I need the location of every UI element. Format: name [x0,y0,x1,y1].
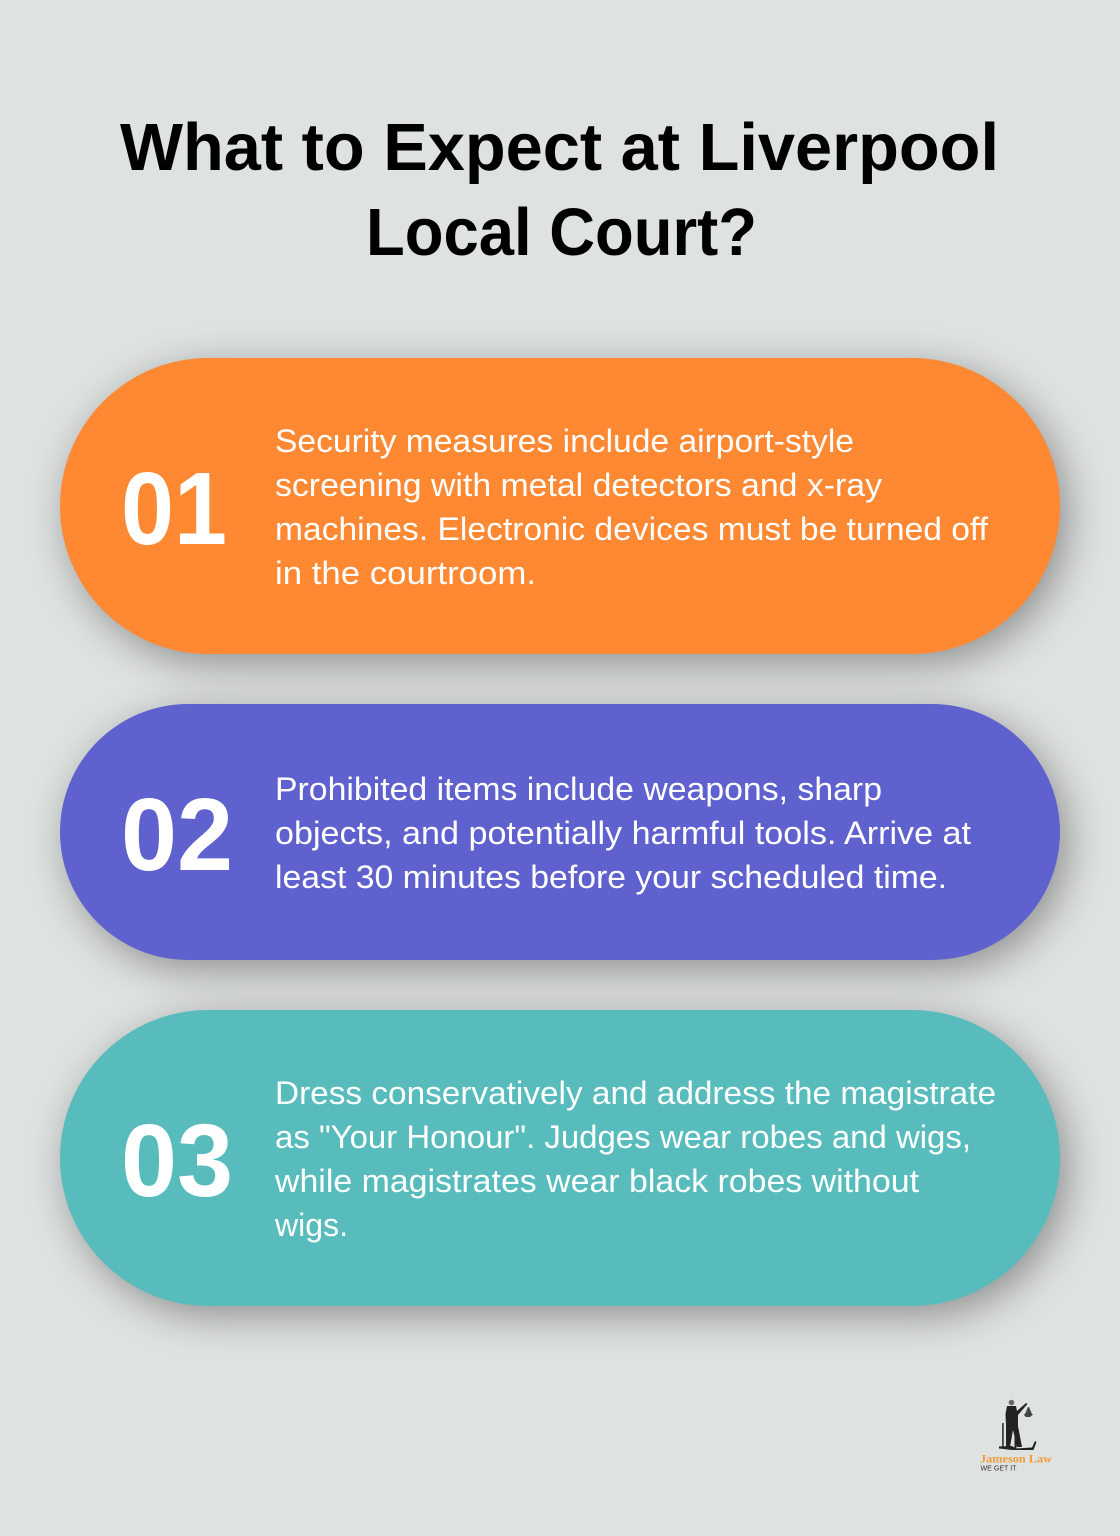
logo tagline: WE GET IT [980,1466,1017,1472]
orange pill background [60,358,1060,654]
text: dress conservatively: as "Your Honour". Judges wear robes and wigs, [275,1119,971,1155]
text: prohibited items: Prohibited items include weapons, sharp [275,771,882,807]
text: security measures: screening with metal detectors and x-ray [275,467,883,503]
text: security measures [275,423,989,591]
text: prohibited items: least 30 minutes before your scheduled time. [275,859,947,895]
logo wordmark: Jameson Law [980,1454,1053,1466]
text: dress conservatively [274,1075,996,1243]
text: prohibited items: objects, and potentially harmful tools. Arrive at [275,815,971,851]
title: Local Court? [366,195,757,270]
logo: Jameson Law [980,1400,1053,1472]
purple pill background [60,704,1060,960]
number 02: 02 [121,777,233,892]
title [120,110,999,270]
text: prohibited items [275,771,971,895]
panel: step 02 prohibited items [60,704,1060,960]
icon: lady justice [999,1400,1036,1450]
panel: step 03 dress and address [60,1010,1060,1306]
teal pill background [60,1010,1060,1306]
number 01: 01 [121,451,227,566]
title: What to Expect at Liverpool [120,110,999,185]
text: security measures: Security measures include airport-style [275,423,854,459]
number 03: 03 [121,1103,233,1218]
text: security measures: in the courtroom. [275,555,536,591]
text: dress conservatively: wigs. [274,1207,348,1243]
text: dress conservatively: Dress conservatively and address the magistrate [275,1075,996,1111]
text: security measures: machines. Electronic devices must be turned off [275,511,989,547]
panel: step 01 security [60,358,1060,654]
text: dress conservatively: while magistrates wear black robes without [274,1163,919,1199]
